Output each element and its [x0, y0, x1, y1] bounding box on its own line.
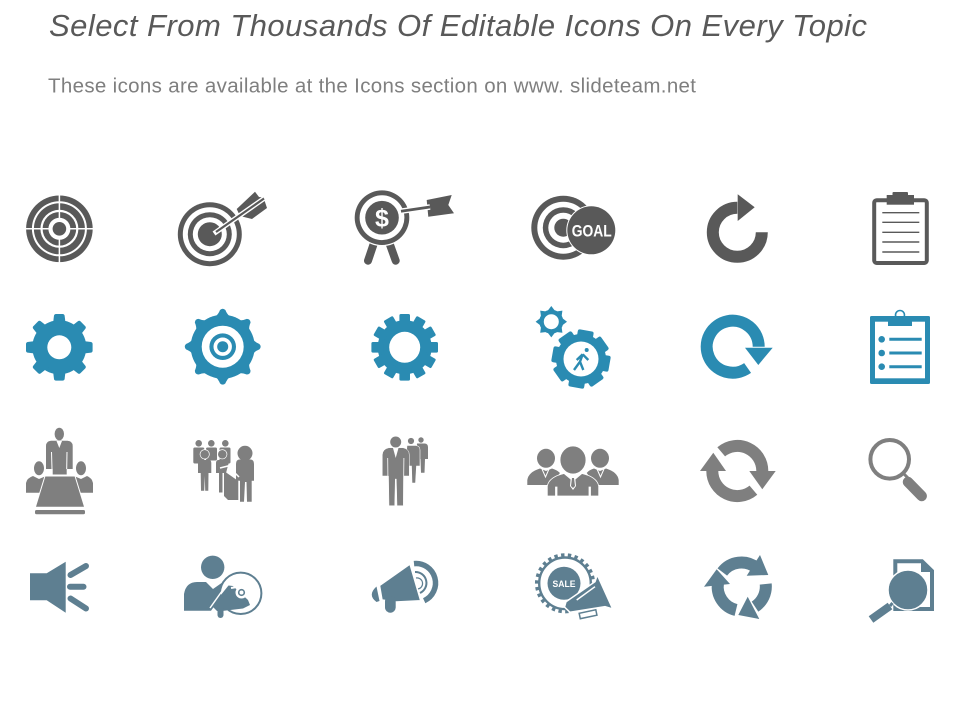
icon: two-arrow refresh loop — [700, 446, 776, 496]
icon: document search — [871, 560, 934, 620]
icon: two gears with walking person — [536, 306, 611, 389]
icon: meeting table — [26, 428, 93, 514]
icon: person with megaphone — [184, 556, 261, 618]
icon: dollar target with dart: $ — [375, 204, 389, 232]
icon: goal target — [531, 196, 616, 260]
title: Select From Thousands Of Editable Icons On Every Topic — [49, 8, 868, 43]
icon: speaker — [30, 562, 86, 613]
icon: circular arrow — [707, 321, 773, 373]
icon: goal target: GOAL — [572, 221, 612, 240]
icon: clipboard with lines — [874, 192, 927, 263]
icon: gear with twelve teeth — [371, 314, 438, 381]
subtitle: These icons are available at the Icons section on www. slideteam.net — [48, 75, 696, 98]
icon: three businessmen in line — [382, 436, 428, 506]
icon: magnifying glass — [870, 440, 922, 496]
icon: gear with eight teeth — [26, 314, 93, 381]
icon: crosshair target — [25, 194, 94, 264]
icon: dollar target with dart — [354, 189, 454, 261]
icon: target with arrow — [178, 192, 267, 266]
icon: three-arrow recycle loop — [704, 555, 768, 619]
icon: sale badge with megaphone — [537, 555, 613, 619]
icon: team of three — [527, 446, 619, 496]
icon: clockwise arrow — [713, 194, 762, 257]
icon: sale badge with megaphone: SALE — [552, 579, 576, 590]
icon: megaphone with sound arcs — [372, 563, 436, 613]
icon: clipboard with checklist — [870, 310, 930, 384]
icon: gear with target centre — [185, 309, 261, 385]
icon: group with presenter — [193, 440, 254, 502]
